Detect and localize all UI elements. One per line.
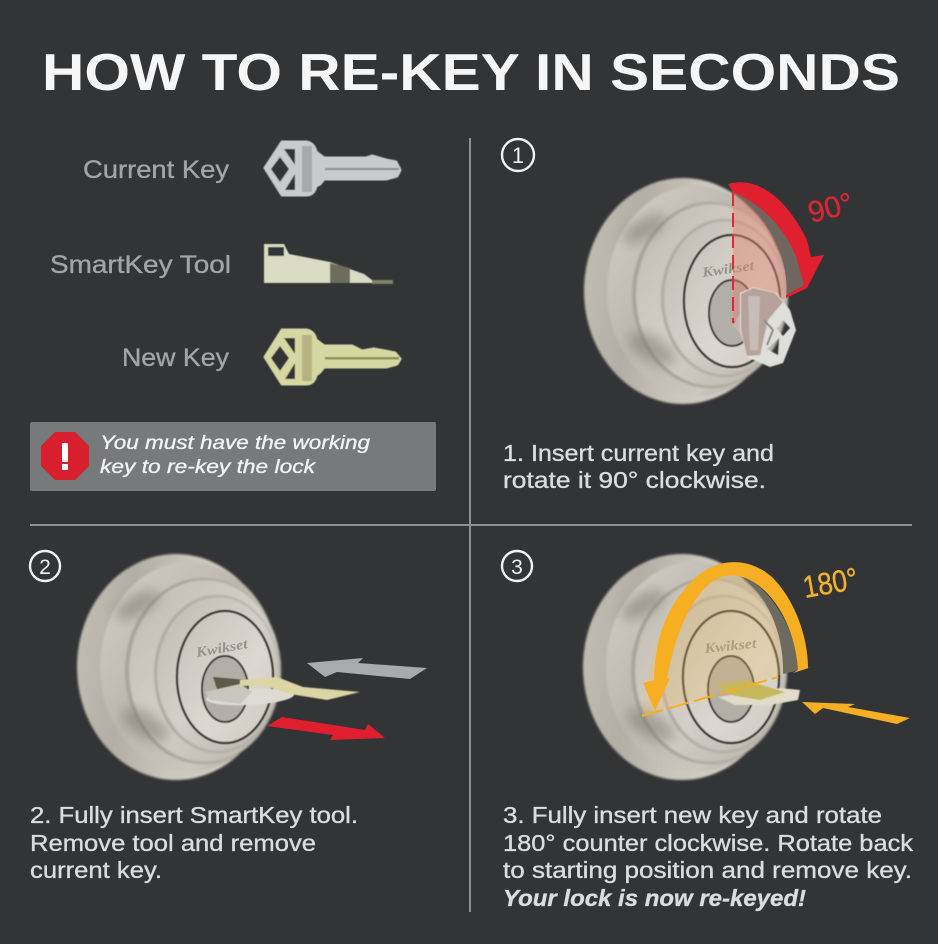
icon: current key (265, 142, 400, 195)
arrow: grey insert (307, 658, 427, 679)
panel: step 2 (30, 551, 427, 883)
callout: warning (30, 422, 436, 491)
step 2 text: 2. Fully insert SmartKey tool. (30, 802, 358, 828)
step 1 text: rotate it 90° clockwise. (503, 467, 766, 493)
label: new key: New Key (122, 344, 230, 372)
step 3 text: Your lock is now re-keyed! (503, 885, 806, 911)
step 3 text: 3. Fully insert new key and rotate (503, 802, 882, 828)
pink wedge (733, 192, 787, 323)
key in lock (733, 287, 796, 367)
step 3 text: 180° counter clockwise. Rotate back (503, 830, 914, 856)
panel: key legend (30, 142, 436, 491)
step 2 text: current key. (30, 857, 162, 883)
step 2 text: Remove tool and remove (30, 830, 316, 856)
number badge 1 (502, 139, 534, 171)
icon: new key (265, 330, 400, 384)
number badge 1: 1 (512, 143, 524, 168)
arrow: red remove (267, 717, 385, 740)
lock illustration 2 (77, 554, 281, 780)
label: current key: Current Key (83, 156, 230, 184)
dividers (30, 138, 912, 912)
key and tool in lock (205, 677, 360, 707)
panel: step 1 (502, 139, 856, 493)
key and tool in lock (716, 680, 800, 705)
number badge 2: 2 (39, 556, 51, 579)
red arc arrow (728, 182, 824, 298)
lock illustration 2: Kwikset (194, 637, 250, 661)
number badge 3: 3 (511, 556, 523, 579)
dashed yellow line (642, 677, 778, 716)
lock illustration 3: Kwikset (703, 636, 758, 657)
label: smartkey tool: SmartKey Tool (50, 251, 231, 279)
panel: step 3 (502, 551, 914, 911)
callout text: key to re-key the lock (100, 457, 317, 478)
number badge 2 (30, 551, 60, 581)
step 3 text: to starting position and remove key. (503, 857, 912, 883)
yellow tint (642, 573, 783, 715)
label: 90 degrees: 90° (805, 187, 856, 230)
lock illustration 3 (583, 554, 787, 780)
label: 180 degrees: 180° (800, 561, 860, 605)
callout text: You must have the working (100, 433, 370, 454)
arrow: yellow insert (802, 702, 910, 724)
title: HOW TO RE-KEY IN SECONDS (42, 44, 900, 102)
dashed lines (733, 192, 778, 323)
lock illustration 1: Kwikset (700, 259, 756, 281)
step 1 text: 1. Insert current key and (503, 440, 774, 466)
yellow arc arrow (643, 562, 812, 711)
number badge 3 (502, 551, 532, 581)
wedge shadow (735, 572, 800, 674)
icon: warning octagon (41, 432, 89, 480)
wedge shadow beyond lock (733, 192, 808, 298)
icon: smartkey tool (264, 244, 393, 284)
lock illustration 1 (584, 178, 788, 404)
